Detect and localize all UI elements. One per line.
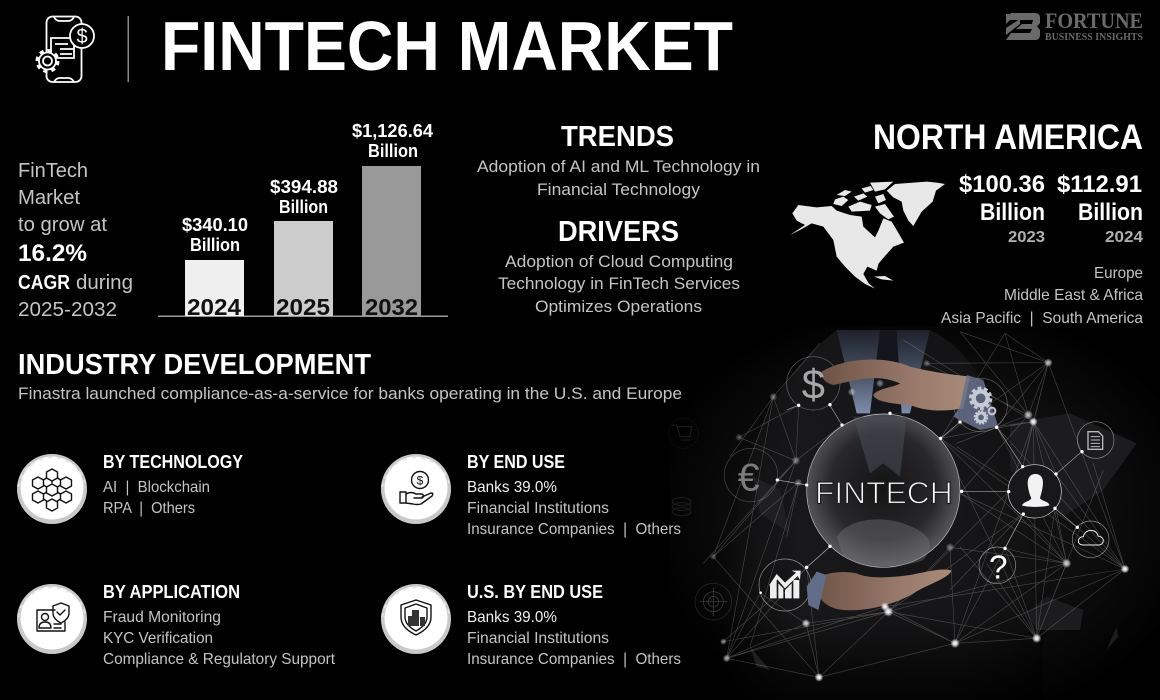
hand: top [821,360,970,411]
other regions [941,265,1143,327]
growth text block: during [76,272,133,294]
growth text block: 16.2% [18,240,87,267]
list [103,479,210,517]
bar 2025: Billion [279,197,328,217]
bar 2032 [352,121,433,320]
icon circles [668,357,1114,620]
panel: by end use [381,452,681,538]
list: RPA | Others [103,500,195,517]
value 2023: 2023 [1008,229,1045,246]
list: Insurance Companies | Others [467,651,681,668]
heading: BY APPLICATION [103,582,240,602]
bar 2024: 2024 [187,294,241,320]
other regions: Middle East & Africa [1004,287,1143,304]
value 2024: $112.91 [1057,171,1142,198]
bar 2025: $394.88 [270,177,338,197]
network lines [703,332,1125,677]
trends [477,121,760,199]
bar 2032: Billion [368,141,418,161]
logo: Fortune Business Insights [1006,8,1143,43]
bar 2024: $340.10 [182,215,248,235]
list: Compliance & Regulatory Support [103,651,336,668]
cloud icon [1078,530,1103,545]
list: Banks 39.0% [467,609,557,626]
industry development [18,349,682,403]
growth text block: 2025-2032 [18,299,117,321]
drivers [498,216,740,316]
person circle [1008,465,1061,518]
value 2024 [1057,171,1143,246]
growth text block: to grow at [18,214,107,236]
trends: Financial Technology [537,180,700,199]
photo: businessman holding fintech globe: € [738,456,760,500]
bar 2032: 2032 [365,294,418,320]
document icon [1088,432,1103,449]
list: Financial Institutions [467,500,609,517]
list [467,479,681,538]
list: AI | Blockchain [103,479,210,496]
small joints [759,403,1084,594]
drivers: DRIVERS [558,216,679,248]
header icon: phone with dollar and gear [37,16,94,82]
growth chart icon [769,571,801,598]
icon: blockchain [17,454,87,524]
value 2023 [959,171,1045,246]
heading: BY END USE [467,452,565,472]
logo: Fortune Business Insights: FORTUNE [1045,8,1143,33]
drivers: Optimizes Operations [535,297,702,316]
bar 2024: Billion [190,235,240,255]
header divider [128,16,129,82]
list: Financial Institutions [467,630,609,647]
list [103,609,336,668]
value 2023: $100.36 [959,171,1045,198]
icon: hand with dollar [381,454,451,524]
trends: Adoption of AI and ML Technology in [477,157,760,176]
list [467,609,681,668]
bar 2032: $1,126.64 [352,121,433,141]
value 2023: Billion [980,199,1045,226]
icon: hand with dollar: $ [417,474,424,488]
glyphs: $ [802,360,825,407]
bar 2025 [270,177,338,320]
title: FINTECH MARKET [161,7,733,85]
bar 2024 [182,215,248,320]
growth text block [18,160,133,321]
list: KYC Verification [103,630,213,647]
growth text block: CAGR [18,272,70,294]
dim cart and coins [672,425,692,516]
drivers: Technology in FinTech Services [498,274,740,293]
globe label: FINTECH [815,475,953,510]
target icon [700,587,727,616]
logo: Fortune Business Insights: BUSINESS INSIGHTS [1045,31,1143,43]
network nodes [710,358,1129,682]
panel: by application [17,582,336,668]
icon: shield with buildings [381,584,451,654]
gears [971,388,995,424]
bar chart [158,121,448,320]
panel: u.s. by end use [381,582,681,668]
list: Banks 39.0% [467,479,557,496]
icon: id card with shield [17,584,87,654]
bottom hand [813,569,952,610]
other regions: Asia Pacific | South America [941,310,1143,327]
growth text block: FinTech [18,160,88,182]
drivers: Adoption of Cloud Computing [505,252,733,271]
heading: BY TECHNOLOGY [103,452,243,472]
header icon: phone with dollar and gear: $ [76,26,88,48]
value 2024: Billion [1078,199,1143,226]
globe [807,414,960,567]
list: Fraud Monitoring [103,609,221,626]
growth text block: Market [18,187,80,209]
industry development: INDUSTRY DEVELOPMENT [18,349,371,381]
value 2024: 2024 [1105,229,1143,246]
industry development: Finastra launched compliance-as-a-service for banks operating in the U.S. and Europe [18,384,682,403]
trends: TRENDS [561,121,674,153]
list: Insurance Companies | Others [467,521,681,538]
panel: by technology [17,452,243,524]
photo: businessman holding fintech globe [668,327,1160,700]
other regions: Europe [1094,265,1143,282]
bar 2025: 2025 [276,294,330,320]
heading: U.S. BY END USE [467,582,603,602]
map: North America [790,182,945,289]
photo: businessman holding fintech globe: ? [989,549,1008,586]
